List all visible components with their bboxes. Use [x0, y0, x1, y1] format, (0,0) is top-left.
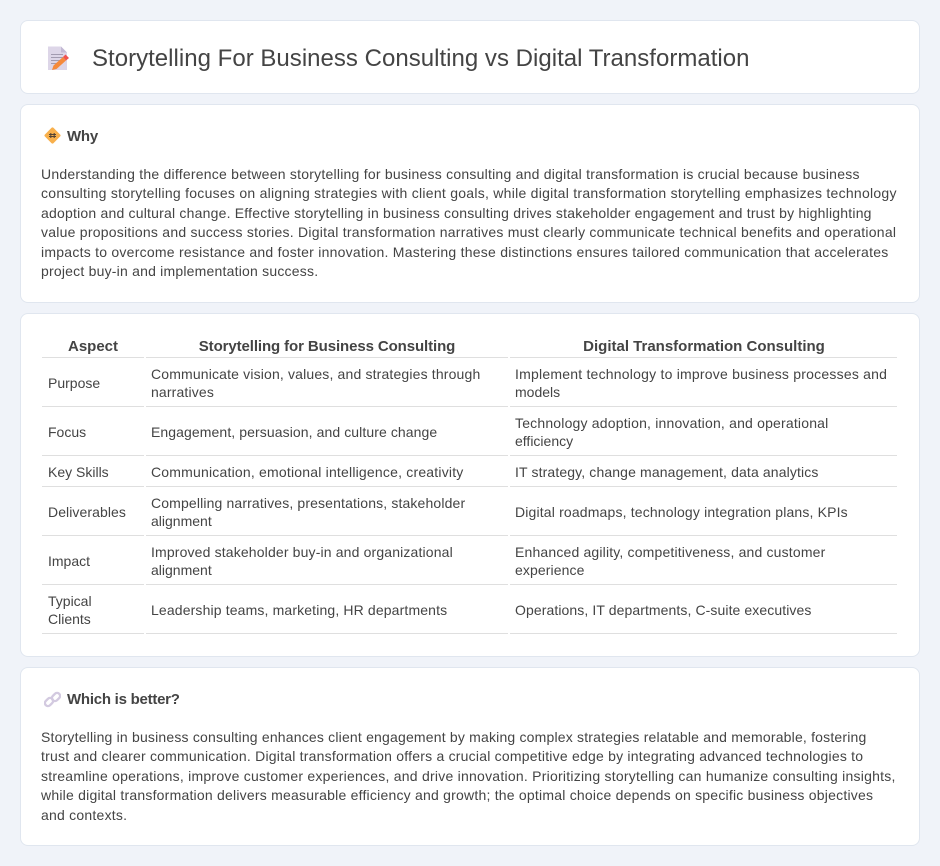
text block: which is better: trust and clearer communication. Digital transformation offers a crucial competitive edge by integrating advanced technologies to — [41, 748, 863, 764]
row: typical clients: Typical — [48, 593, 92, 609]
comparison table — [42, 338, 897, 634]
row: deliverables — [48, 495, 848, 529]
text block: why: consulting storytelling focuses on aligning strategies with client goals, while digital transformation storytelling emphasizes technology — [41, 185, 897, 201]
row: typical clients: Clients — [48, 611, 91, 627]
row: deliverables: Digital roadmaps, technology integration plans, KPIs — [515, 504, 848, 520]
text block: which is better: while digital transformation delivers measurable efficiency and growth; the optimal choice depends on specific business objectives — [41, 787, 873, 803]
row: key skills: Communication, emotional intelligence, creativity — [151, 464, 464, 480]
row: typical clients — [48, 593, 811, 627]
row: typical clients: Operations, IT departments, C-suite executives — [515, 602, 811, 618]
icon: link — [44, 692, 61, 708]
row: deliverables: alignment — [151, 513, 212, 529]
row: typical clients: Leadership teams, marketing, HR departments — [151, 602, 447, 618]
row: focus: efficiency — [515, 433, 573, 449]
row: key skills — [48, 464, 819, 480]
icon: document with pencil — [48, 46, 69, 70]
row: focus: Technology adoption, innovation, and operational — [515, 415, 828, 431]
table header row — [68, 338, 825, 355]
row: purpose: Communicate vision, values, and strategies through — [151, 366, 480, 382]
row: purpose — [48, 366, 887, 400]
text block: why: value propositions and success stories. Digital transformation narratives must clearly communicate technical benefits and operational — [41, 224, 896, 240]
panel: title header — [20, 20, 920, 94]
row: focus — [48, 415, 828, 449]
row: purpose: Purpose — [48, 375, 100, 391]
table header row: Aspect — [68, 338, 118, 355]
row: impact: alignment — [151, 562, 212, 578]
row: impact — [48, 544, 826, 578]
row: deliverables: Compelling narratives, presentations, stakeholder — [151, 495, 465, 511]
row: focus: Engagement, persuasion, and culture change — [151, 424, 437, 440]
text block: which is better: and contexts. — [41, 807, 127, 823]
text block: which is better: streamline operations, improve customer experiences, and drive innovation. Prioritizing storytelling can humanize consulting insights, — [41, 768, 896, 784]
text block: why: impacts to overcome resistance and foster innovation. Mastering these distinctions ensures tailored communication that accelerates — [41, 244, 888, 260]
row: impact: Improved stakeholder buy-in and organizational — [151, 544, 453, 560]
row: key skills: Key Skills — [48, 464, 109, 480]
row: deliverables: Deliverables — [48, 504, 126, 520]
icon: warning diamond — [44, 127, 61, 144]
row: impact: Impact — [48, 553, 90, 569]
text block: why: project buy-in and implementation success. — [41, 263, 318, 279]
text block: why: adoption and cultural change. Effective storytelling in business consulting drives stakeholder engagement and trust by highlighting — [41, 205, 872, 221]
row: impact: Enhanced agility, competitiveness, and customer — [515, 544, 825, 560]
row: key skills: IT strategy, change management, data analytics — [515, 464, 819, 480]
text block: why: Understanding the difference between storytelling for business consulting and digital transformation is crucial because business — [41, 166, 860, 182]
panel: why — [20, 104, 920, 303]
row: purpose: narratives — [151, 384, 214, 400]
row: focus: Focus — [48, 424, 86, 440]
row: impact: experience — [515, 562, 584, 578]
row: purpose: models — [515, 384, 560, 400]
panel: comparison table — [20, 313, 920, 657]
text block: which is better: Storytelling in business consulting enhances client engagement by making complex strategies relatable and memorable, fostering — [41, 729, 866, 745]
table header row: Digital Transformation Consulting — [583, 338, 825, 355]
heading: which is better: Which is better? — [67, 691, 180, 708]
table header row: Storytelling for Business Consulting — [199, 338, 455, 355]
panel: which is better — [20, 667, 920, 846]
text block: which is better — [41, 729, 896, 823]
title: Storytelling For Business Consulting vs Digital Transformation — [92, 45, 750, 72]
row: purpose: Implement technology to improve business processes and — [515, 366, 887, 382]
text block: why — [41, 166, 897, 279]
heading: why: Why — [67, 128, 98, 145]
